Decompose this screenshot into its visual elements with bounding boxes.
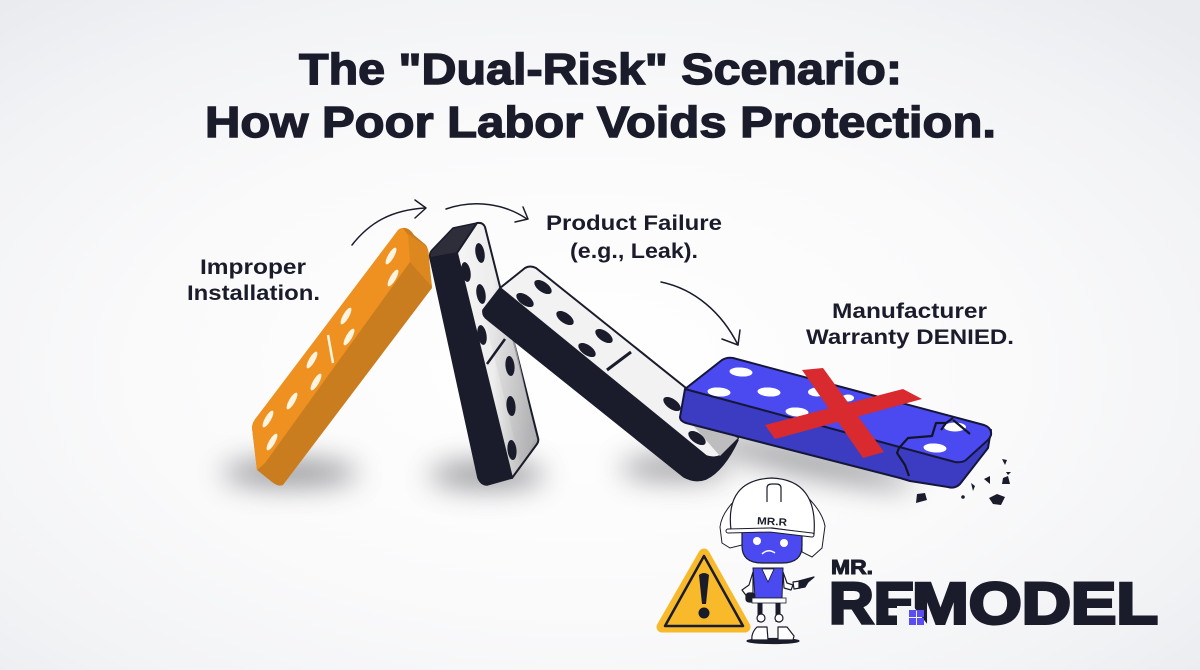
logo: Mr. Remodel: MODEL: [912, 572, 1158, 636]
label: product failure: (e.g., Leak).: [570, 240, 698, 263]
crack: [897, 418, 970, 476]
label: product failure: Product Failure: [546, 212, 722, 235]
robot ears: [720, 493, 825, 557]
arrow: orange to black domino: [352, 200, 426, 245]
red x mark: [765, 368, 922, 458]
logo: Mr. Remodel: MR.: [831, 557, 873, 579]
debris: [916, 459, 1011, 505]
label: product failure: [546, 212, 722, 263]
robot head: [742, 530, 802, 563]
title: [205, 45, 996, 147]
robot arms: [742, 572, 814, 602]
robot vest: [753, 568, 783, 598]
label: improper installation: Improper: [200, 256, 306, 279]
logo: Mr. Remodel: [829, 557, 1158, 636]
label: warranty denied: [806, 300, 1014, 349]
mascot: robot: [720, 478, 825, 644]
icon: warning triangle: [662, 554, 745, 627]
mascot: robot: MR.R: [757, 515, 788, 529]
ground shadows: [222, 426, 916, 498]
domino: black falling: [483, 266, 738, 481]
notch behind window icon: [897, 606, 928, 628]
arrow: black domino to product failure: [446, 204, 528, 222]
title: The "Dual-Risk" Scenario:: [299, 45, 902, 94]
label: improper installation: [187, 256, 320, 305]
label: warranty denied: Manufacturer: [832, 300, 987, 323]
label: improper installation: Installation.: [187, 282, 320, 305]
domino: orange: [252, 228, 432, 486]
icon: window: [909, 610, 924, 625]
logo: Mr. Remodel: RE: [829, 572, 915, 636]
domino: blue cracked: [680, 358, 991, 488]
title: How Poor Labor Voids Protection.: [205, 98, 996, 147]
arrow: product failure to warranty: [661, 282, 740, 345]
label: warranty denied: Warranty DENIED.: [806, 326, 1014, 349]
robot hard hat: [730, 478, 814, 534]
robot legs and feet: [747, 602, 799, 644]
domino: black upright: [430, 223, 538, 485]
